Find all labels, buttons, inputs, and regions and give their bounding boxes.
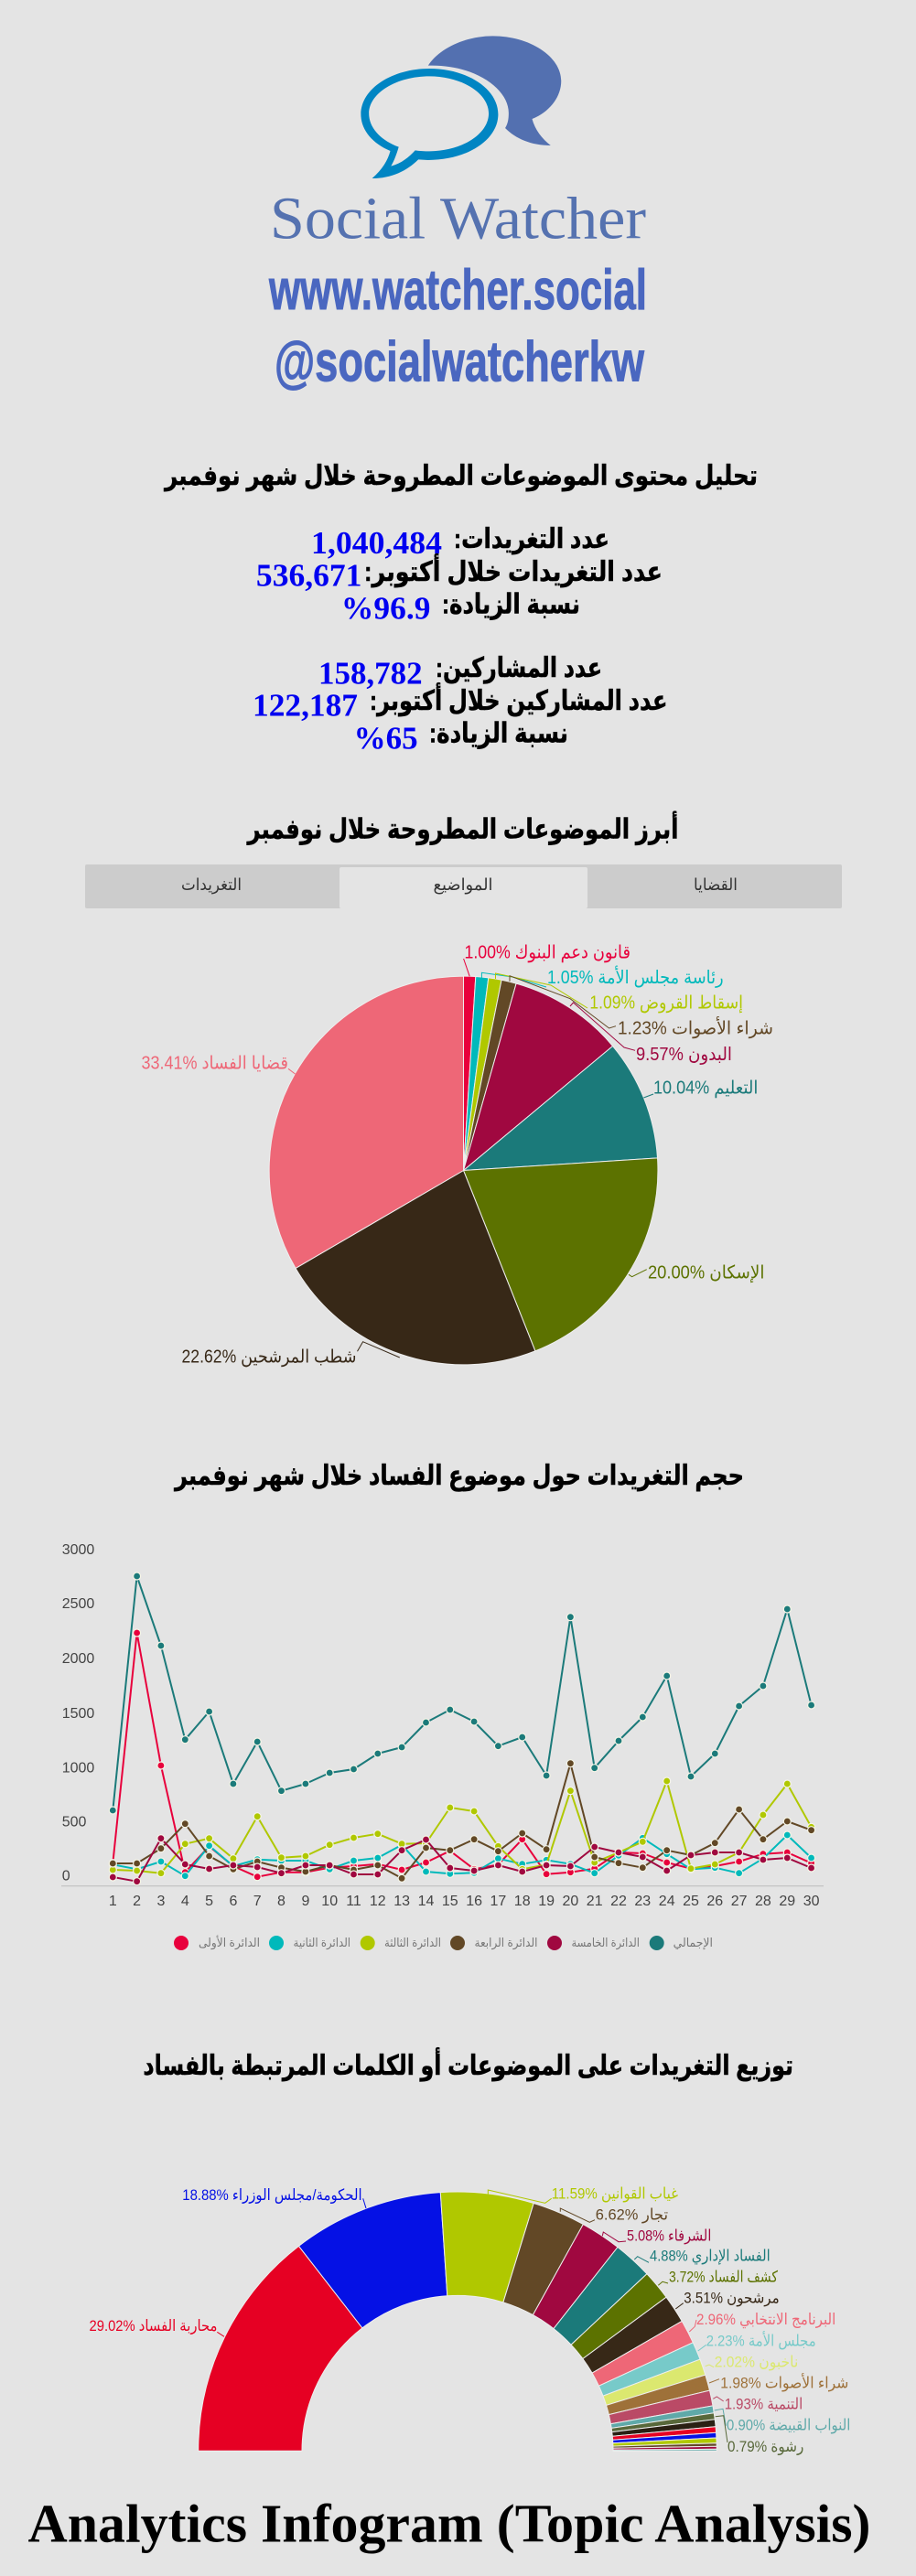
semi-donut chart: corruption keywords xyxy=(90,2184,850,2455)
tab: issues: القضايا xyxy=(694,875,738,894)
x axis labels: 9 xyxy=(301,1894,309,1909)
legend: second district: الدائرة الثانية xyxy=(294,1936,350,1950)
label: bidoon: البدون ‎9.57% xyxy=(636,1045,732,1065)
stat: tweets count xyxy=(311,524,609,561)
twitter handle: @socialwatcherkw xyxy=(275,331,645,394)
y axis labels: 3000 xyxy=(62,1542,94,1558)
stat: participants in October xyxy=(253,682,667,724)
legend: fifth district xyxy=(547,1936,640,1950)
x axis labels: 7 xyxy=(253,1894,262,1909)
stats block: participants xyxy=(253,653,667,756)
pie chart: topics xyxy=(141,942,773,1367)
label: banks law xyxy=(464,942,630,976)
y axis labels: 500 xyxy=(62,1815,86,1830)
label: candidates disqualification xyxy=(181,1342,400,1367)
label: administrative corruption: الفساد الإداري ‎4.88% xyxy=(650,2248,771,2266)
label: corruption issues: قضايا الفساد ‎33.41% xyxy=(141,1053,288,1073)
stat: tweets in October xyxy=(256,553,663,594)
x axis labels: 20 xyxy=(563,1894,578,1909)
x axis labels: 8 xyxy=(277,1894,286,1909)
stat: tweets increase: %96.9 xyxy=(341,591,430,627)
stat: participants increase: نسبة الزيادة: xyxy=(429,719,568,749)
stat: participants count: عدد المشاركين: xyxy=(436,653,602,683)
heading: corruption tweets volume: حجم التغريدات حول موضوع الفساد خلال شهر نوفمبر xyxy=(173,1461,744,1492)
stat: participants in October: عدد المشاركين خلال أكتوبر: xyxy=(370,682,667,716)
x axis labels: 29 xyxy=(779,1894,795,1909)
legend xyxy=(174,1935,713,1950)
line chart: daily tweets xyxy=(61,1542,824,1950)
label: assembly presidency xyxy=(481,966,724,988)
x axis labels: 11 xyxy=(346,1894,361,1909)
x axis labels: 1 xyxy=(109,1894,117,1909)
x axis labels: 25 xyxy=(683,1894,699,1909)
x axis labels: 4 xyxy=(181,1894,189,1909)
stats block: tweets xyxy=(256,524,663,627)
label: loans: إسقاط القروض ‎1.09% xyxy=(589,993,743,1014)
main heading: تحليل محتوى الموضوعات المطروحة خلال شهر نوفمبر xyxy=(163,461,758,492)
label: government: الحكومة/مجلس الوزراء ‎18.88% xyxy=(182,2186,362,2204)
stat: tweets increase: نسبة الزيادة: xyxy=(442,590,580,620)
x axis labels: 6 xyxy=(229,1894,237,1909)
heading: top topics: أبرز الموضوعات المطروحة خلال نوفمبر xyxy=(246,811,679,846)
stat: participants count xyxy=(318,653,602,691)
label: fighting corruption: محاربة الفساد ‎29.02% xyxy=(90,2317,218,2334)
legend: first district: الدائرة الأولى xyxy=(199,1935,260,1950)
x axis labels: 12 xyxy=(370,1894,386,1909)
label: honourable: الشرفاء ‎5.08% xyxy=(627,2227,711,2244)
x axis labels: 18 xyxy=(514,1894,531,1909)
stat: participants count: 158,782 xyxy=(318,655,423,691)
stat: tweets increase xyxy=(341,590,580,627)
stat: tweets count: 1,040,484 xyxy=(311,525,442,561)
x axis labels: 17 xyxy=(490,1894,506,1909)
tab: tweets: التغريدات xyxy=(181,875,242,895)
stat: tweets in October: عدد التغريدات خلال أكتوبر: xyxy=(364,553,663,587)
legend: total xyxy=(650,1936,713,1950)
x axis labels: 21 xyxy=(587,1894,603,1909)
label: bribery: رشوة ‎0.79% xyxy=(727,2438,803,2455)
x axis labels: 27 xyxy=(731,1894,748,1909)
label: electoral programme: البرنامج الانتخابي ‎2.96% xyxy=(696,2311,835,2329)
label: candidates: مرشحون ‎3.51% xyxy=(684,2290,780,2307)
label: voters: ناخبون ‎2.02% xyxy=(715,2353,798,2370)
label: merchants: تجار ‎6.62% xyxy=(596,2206,668,2224)
label: national assembly: مجلس الأمة ‎2.23% xyxy=(706,2331,816,2349)
x axis labels: 16 xyxy=(466,1894,482,1909)
x axis labels: 13 xyxy=(393,1894,410,1909)
legend: third district: الدائرة الثالثة xyxy=(384,1936,441,1950)
x axis labels: 26 xyxy=(706,1894,723,1909)
x axis labels: 5 xyxy=(205,1894,213,1909)
label: assembly presidency: رئاسة مجلس الأمة ‎1.05% xyxy=(547,966,724,988)
x axis labels: 10 xyxy=(321,1894,338,1909)
legend: second district xyxy=(269,1936,350,1950)
label: development: التنمية ‎1.93% xyxy=(725,2395,803,2412)
x axis labels xyxy=(109,1894,820,1909)
label: education: التعليم ‎10.04% xyxy=(653,1079,758,1099)
legend: total: الإجمالي xyxy=(674,1936,713,1949)
x axis labels: 15 xyxy=(442,1894,458,1909)
legend: fifth district: الدائرة الخامسة xyxy=(571,1936,640,1950)
brand name: Social Watcher xyxy=(270,186,646,252)
stat: tweets in October: 536,671 xyxy=(256,558,361,594)
legend: third district xyxy=(361,1936,441,1950)
stat: tweets count: عدد التغريدات: xyxy=(454,524,609,554)
legend: first district xyxy=(174,1935,260,1950)
series: total xyxy=(113,1576,812,1810)
stat: participants increase: %65 xyxy=(354,720,418,756)
y axis labels: 1500 xyxy=(62,1706,94,1722)
x axis labels: 30 xyxy=(803,1894,820,1909)
x axis labels: 19 xyxy=(538,1894,555,1909)
stat: participants increase xyxy=(354,719,568,756)
label: absence of laws xyxy=(488,2184,678,2203)
x axis labels: 28 xyxy=(755,1894,771,1909)
y axis labels: 2500 xyxy=(62,1596,94,1612)
x axis labels: 2 xyxy=(133,1894,141,1909)
label: bribery xyxy=(716,2416,803,2455)
y axis labels: 2000 xyxy=(62,1651,94,1667)
series: fourth district xyxy=(113,1764,812,1878)
stat: participants in October: 122,187 xyxy=(253,688,358,724)
y axis labels: 0 xyxy=(62,1869,70,1884)
label: housing: الإسكان ‎20.00% xyxy=(648,1262,764,1283)
pie slices xyxy=(269,976,658,1365)
label: candidates disqualification: شطب المرشحين ‎22.62% xyxy=(181,1347,357,1367)
donut slices xyxy=(199,2192,717,2451)
x axis labels: 24 xyxy=(659,1894,675,1909)
x axis labels: 3 xyxy=(156,1894,165,1909)
label: bidoon xyxy=(570,1003,732,1065)
tab: topics: المواضيع xyxy=(434,875,492,895)
series: second district xyxy=(113,1835,812,1876)
label: loans xyxy=(496,973,743,1014)
legend: fourth district xyxy=(450,1936,538,1950)
y axis labels: 1000 xyxy=(62,1760,94,1776)
label: absence of laws: غياب القوانين ‎11.59% xyxy=(552,2184,678,2202)
label: bribed MPs: النواب القبيضة ‎0.90% xyxy=(727,2417,850,2434)
legend: fourth district: الدائرة الرابعة xyxy=(474,1936,538,1950)
label: banks law: قانون دعم البنوك ‎1.00% xyxy=(464,942,630,962)
label: vote buying: شراء الأصوات ‎1.23% xyxy=(618,1017,773,1039)
footer title: Analytics Infogram (Topic Analysis) xyxy=(27,2493,871,2553)
data series xyxy=(113,1576,812,1882)
label: merchants xyxy=(560,2206,668,2224)
label: vote buying xyxy=(510,976,773,1039)
label: exposing corruption: كشف الفساد ‎3.72% xyxy=(669,2268,779,2285)
x axis labels: 23 xyxy=(634,1894,651,1909)
website address: www.watcher.social xyxy=(268,259,647,322)
x axis labels: 22 xyxy=(610,1894,627,1909)
y axis labels xyxy=(62,1542,94,1884)
label: vote buying: شراء الأصوات ‎1.98% xyxy=(720,2374,848,2392)
series: fifth district xyxy=(113,1839,812,1882)
label: bribed MPs xyxy=(715,2409,850,2434)
x axis labels: 14 xyxy=(418,1894,434,1909)
series: first district xyxy=(113,1633,812,1877)
series: third district xyxy=(113,1781,812,1873)
tabs xyxy=(85,864,842,908)
logo: speech bubbles xyxy=(361,36,561,178)
